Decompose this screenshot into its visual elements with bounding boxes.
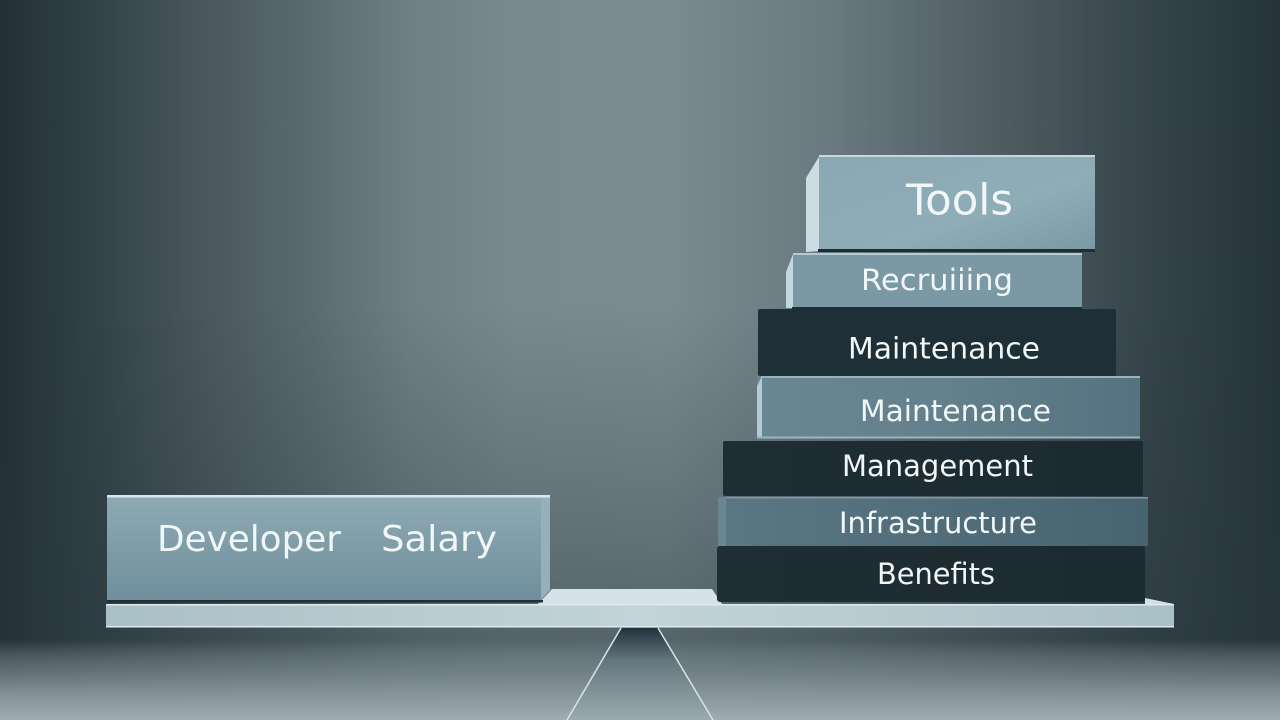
seesaw balance (106, 589, 1174, 720)
block: recruiting: Recruiiing (861, 263, 1013, 297)
block: infrastructure: Infrastructure (839, 506, 1037, 540)
block: management: Management (842, 449, 1033, 483)
block: tools: Tools (905, 176, 1013, 226)
block: developer salary (107, 495, 550, 602)
block: management (723, 441, 1143, 496)
block: tools (806, 155, 1095, 252)
block: infrastructure (718, 497, 1148, 546)
block: recruiting (786, 253, 1082, 309)
label: developer salary: Developer (157, 519, 341, 560)
label: developer salary: Salary (381, 519, 497, 560)
beam (106, 589, 1174, 628)
block: benefits: Benefits (877, 557, 995, 591)
block: maintenance dark (758, 309, 1116, 376)
block: maintenance light (757, 376, 1140, 438)
label: developer salary (157, 519, 497, 560)
block: maintenance dark: Maintenance (848, 332, 1040, 366)
block: benefits (717, 546, 1145, 602)
fulcrum (567, 628, 713, 720)
floor (0, 640, 1280, 720)
cost stack (717, 155, 1148, 602)
block: maintenance light: Maintenance (860, 394, 1051, 428)
